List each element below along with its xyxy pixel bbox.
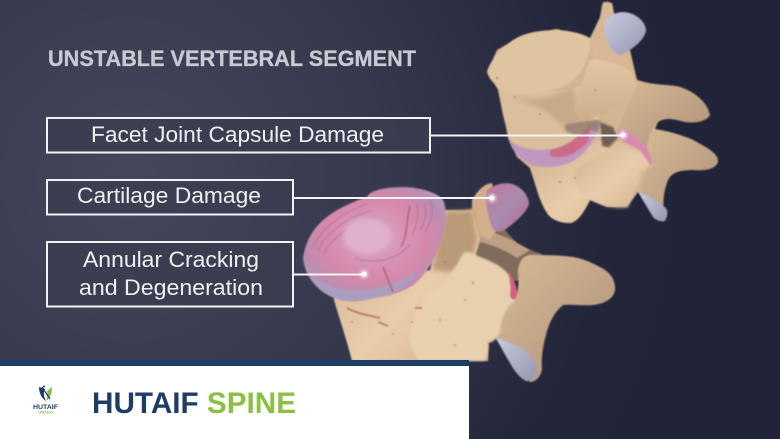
lit bridge surface xyxy=(470,212,530,258)
cartilage on facet xyxy=(486,183,529,232)
label text: and Degeneration xyxy=(79,275,263,300)
dark joint gap xyxy=(600,122,618,148)
grey inferior facet xyxy=(638,192,667,221)
upper articular stem xyxy=(472,183,500,240)
red endplate marks xyxy=(347,308,422,326)
pink inflamed tip xyxy=(508,272,517,299)
navy top band xyxy=(0,360,469,366)
label box xyxy=(47,180,293,214)
anatomy: upper vertebra xyxy=(487,2,718,223)
transverse process xyxy=(574,60,637,122)
leader line: facet joint xyxy=(431,130,628,140)
grey superior facet xyxy=(604,12,646,55)
shaded recess xyxy=(565,120,600,134)
label box xyxy=(47,118,430,152)
articular process xyxy=(410,252,517,361)
annular cracks xyxy=(383,206,410,292)
shaded spinous processes xyxy=(617,80,710,147)
leader line: cartilage xyxy=(294,194,496,202)
logo name: HUTAIF xyxy=(33,404,58,411)
dark bridge base xyxy=(445,208,542,290)
title: UNSTABLE VERTEBRAL SEGMENT xyxy=(48,46,417,71)
grey inferior facet xyxy=(495,337,537,381)
label: cartilage damage xyxy=(47,180,293,214)
bone pores xyxy=(496,77,596,183)
leader line: annular xyxy=(294,270,368,278)
lower spinous process xyxy=(640,130,718,221)
pale nucleus xyxy=(343,218,391,254)
shadow under endplate xyxy=(505,88,585,128)
label text: Annular Cracking xyxy=(83,247,259,272)
label: facet joint capsule damage xyxy=(47,118,430,152)
logo xyxy=(33,386,58,414)
red disc core xyxy=(550,122,592,157)
footer panel xyxy=(0,360,469,439)
vertebral body xyxy=(333,210,489,361)
bone silhouette xyxy=(487,2,718,223)
bone pores xyxy=(351,261,474,346)
brand name: HUTAIF SPINE xyxy=(92,387,296,420)
intervertebral disc xyxy=(508,122,602,167)
disc outer lilac rim xyxy=(308,270,418,302)
vertebral body lower xyxy=(530,140,640,223)
vertebral body top endplate xyxy=(487,30,590,94)
right spinous process xyxy=(497,255,615,382)
label: annular cracking and degeneration xyxy=(47,242,293,306)
label text: Facet Joint Capsule Damage xyxy=(91,122,384,147)
logo mark xyxy=(39,386,52,401)
facet joint capsule xyxy=(617,130,653,165)
anatomy: lower vertebra xyxy=(303,183,615,382)
vertebral body upper xyxy=(497,85,600,149)
intervertebral disc xyxy=(303,187,446,301)
superior articular post xyxy=(590,2,637,82)
lower articular process xyxy=(573,140,652,208)
label text: Cartilage Damage xyxy=(77,183,261,208)
white panel xyxy=(0,366,469,439)
disc lamellae rings xyxy=(313,200,432,261)
logo subline: ORTHO xyxy=(38,410,53,414)
label box xyxy=(47,242,293,306)
brown pedicle shading xyxy=(432,210,478,272)
